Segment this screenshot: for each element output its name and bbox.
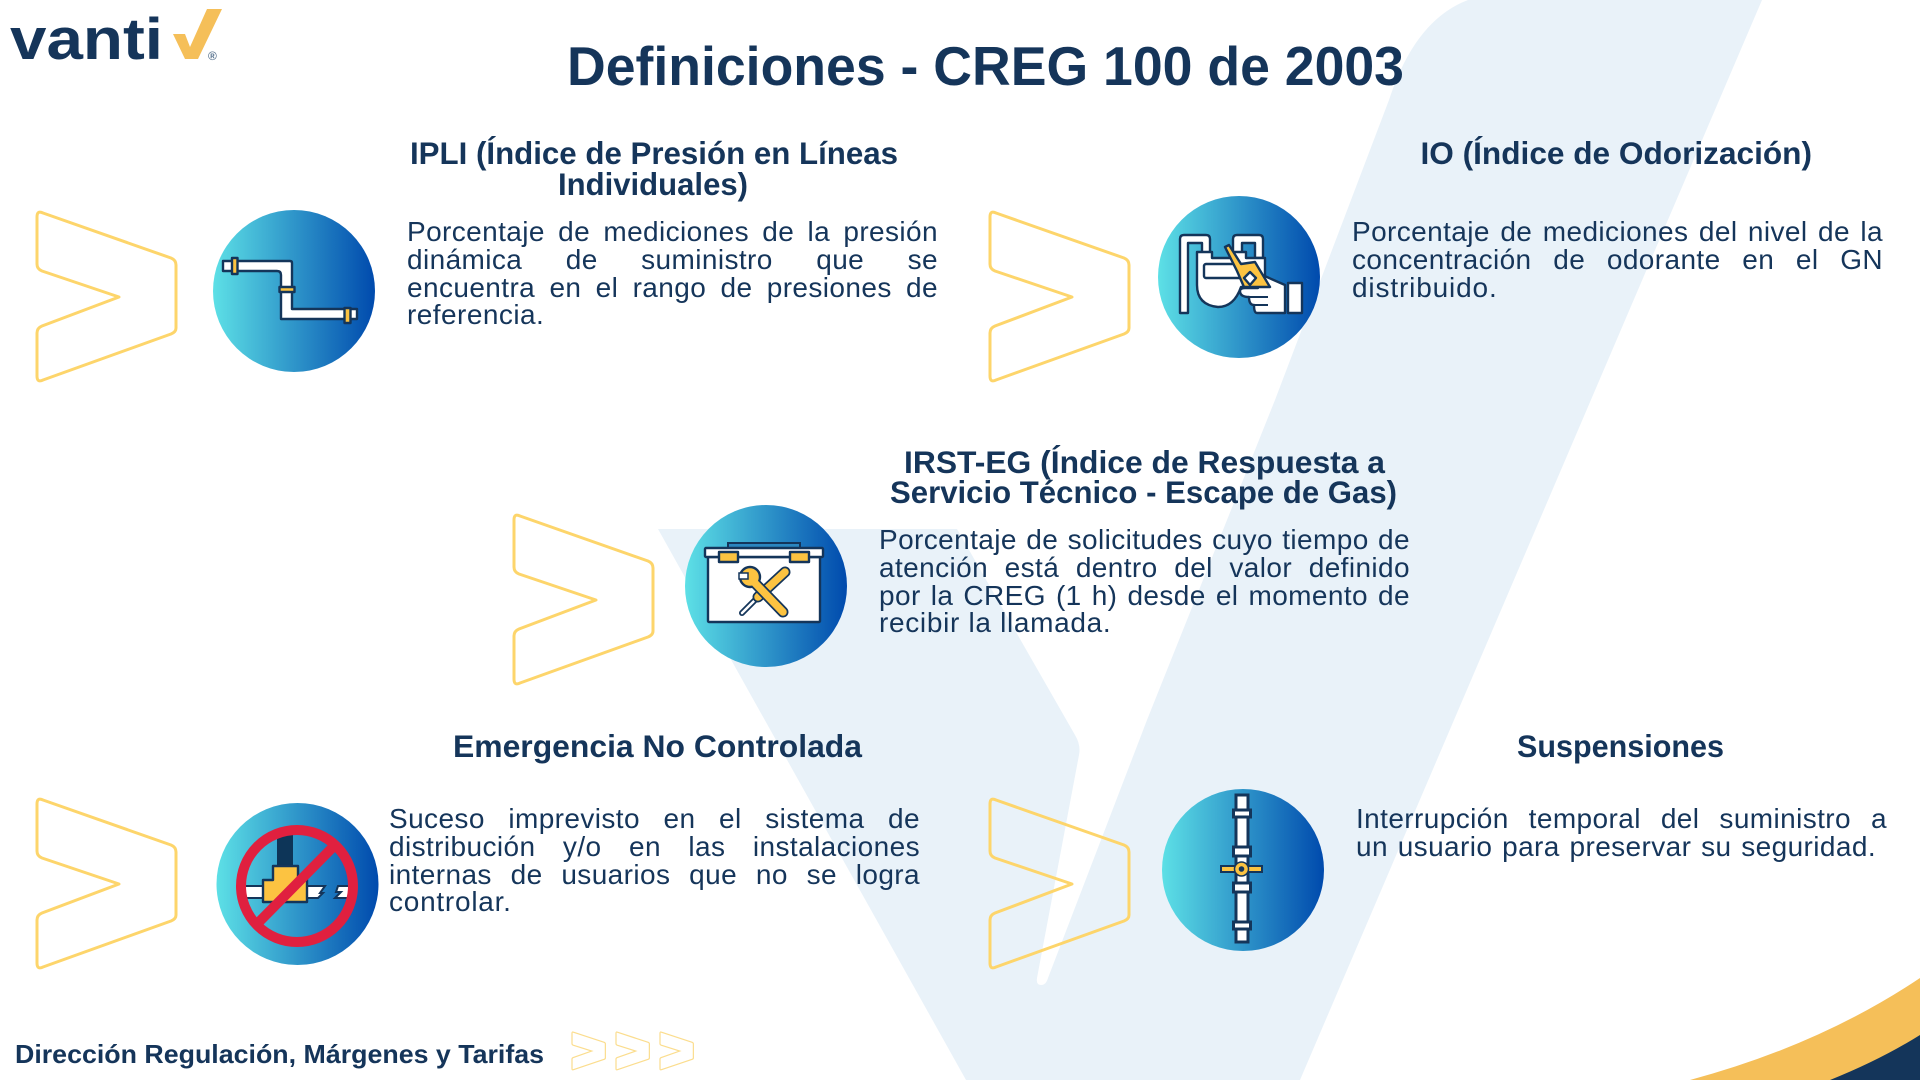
heading: IO (Índice de Odorización) [1420,135,1812,171]
footer chevrons [572,1032,693,1070]
heading [410,135,898,202]
body text: por la CREG (1 h) desde el momento de [879,580,1410,611]
panel: IPLI [37,135,938,381]
heading: Suspensiones [1517,728,1724,764]
body text [1356,805,1887,865]
panel: IRST-EG [514,444,1410,684]
body text: dinámica de suministro que se [407,244,938,275]
chevron [514,515,653,684]
body text: recibir la llamada. [879,607,1111,638]
background check mark watermark [658,0,1762,1080]
body text: internas de usuarios que no se logra [389,859,920,890]
heading: Emergencia No Controlada [453,728,862,764]
body text [407,218,938,333]
icon: pipe [213,210,375,372]
heading: IPLI (Índice de Presión en Líneas [410,135,898,171]
panel: IO [990,135,1883,381]
body text: referencia. [407,299,544,330]
title: Definiciones - CREG 100 de 2003 [567,35,1404,97]
icon: gas meter and detector [1158,196,1320,358]
chevron [37,799,176,968]
body text: un usuario para preservar su seguridad. [1356,831,1876,862]
logo: vanti: vanti [10,7,163,72]
body text: distribución y/o en las instalaciones [389,831,920,862]
body text [389,805,920,920]
body text: atención está dentro del valor definido [879,552,1410,583]
chevron [990,212,1129,381]
body text [879,526,1410,641]
body text: controlar. [389,886,512,917]
logo: vanti: ® [208,49,217,63]
logo: vanti [10,7,222,72]
footer label: Dirección Regulación, Márgenes y Tarifas [15,1039,544,1069]
icon: prohibited leaking fitting [216,803,378,965]
corner decoration: orange and navy swoosh [1690,978,1920,1080]
chevron [990,799,1129,968]
heading [890,444,1397,510]
heading: Individuales) [558,166,748,202]
body text: concentración de odorante en el GN [1352,244,1883,275]
icon: toolbox [685,505,847,667]
panel: Suspensiones [990,728,1887,968]
body text: encuentra en el rango de presiones de [407,272,938,303]
body text [1352,218,1883,308]
chevron [37,212,176,381]
panel: Emergencia No Controlada [37,728,920,968]
body text: distribuido. [1352,272,1498,303]
icon: pipe valve [1162,789,1324,951]
heading: IRST-EG (Índice de Respuesta a [904,444,1385,480]
heading: Servicio Técnico - Escape de Gas) [890,474,1397,510]
